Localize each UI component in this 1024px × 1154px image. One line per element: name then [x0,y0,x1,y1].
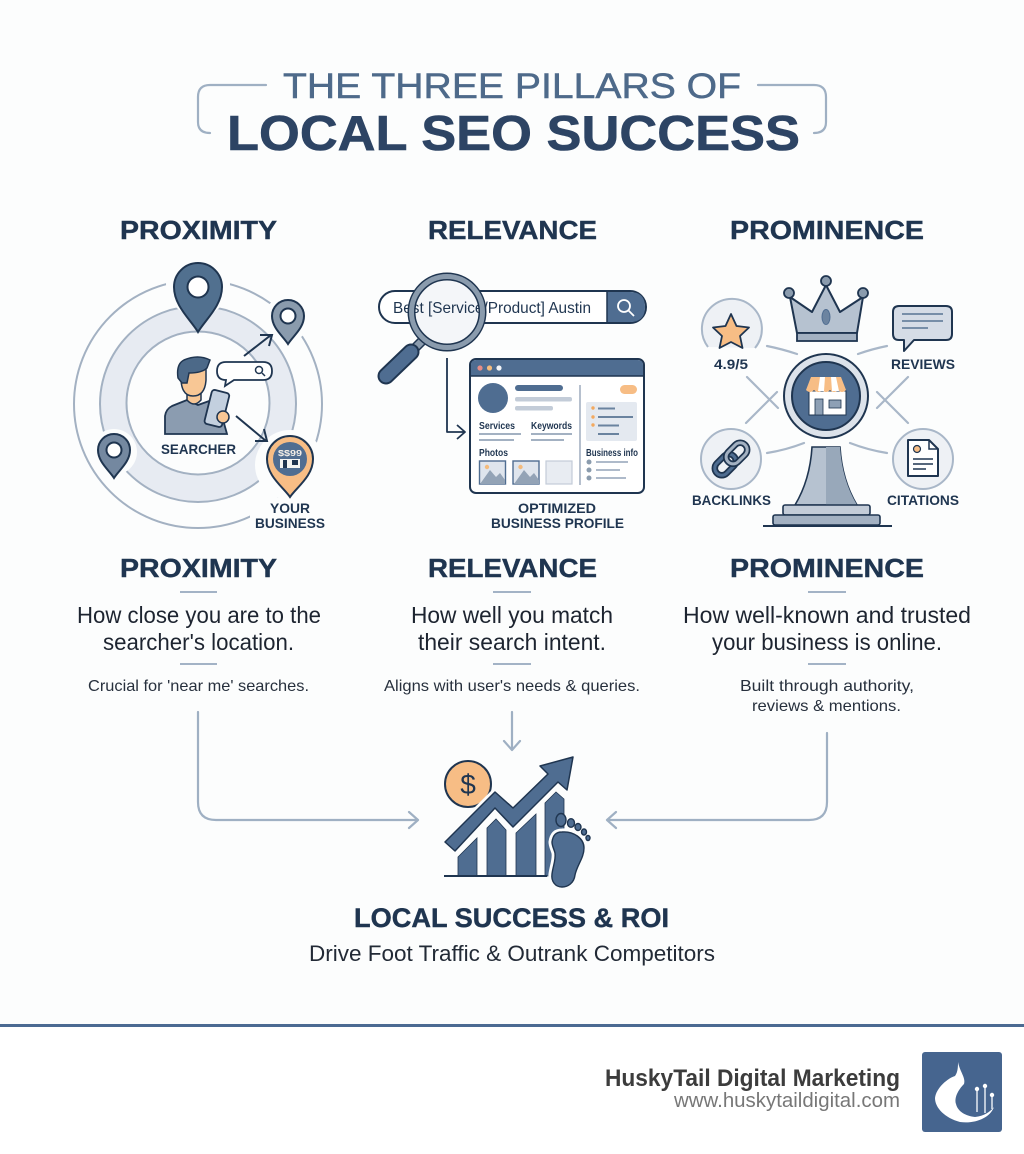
description: proximity [77,602,321,655]
description: proximity: searcher's location. [103,629,294,655]
label: your business: YOUR [270,500,310,516]
chart bars [458,792,564,876]
icon: logo [922,1052,1002,1132]
icon: trophy stand [763,447,892,526]
arrow: to your business [236,416,267,441]
photo thumbnail one [480,461,506,484]
rising arrow [445,757,573,851]
heading: prominence: PROMINENCE [730,215,924,245]
icon: growth chart with coin and footprint [444,757,590,887]
text block: relevance [384,553,640,695]
text block: proximity [77,553,321,695]
icon: central storefront medallion [784,354,868,438]
panel: proximity illustration [74,252,330,534]
icon: left map pin [98,434,130,478]
description: relevance: their search intent. [418,629,606,655]
panel: business profile window [470,359,644,493]
note: prominence [740,678,914,715]
description: prominence: How well-known and trusted [683,602,971,628]
result heading: LOCAL SUCCESS & ROI [354,903,669,933]
description: prominence [683,602,971,655]
description: prominence: your business is online. [712,629,942,655]
text block: prominence [683,553,971,715]
brand url: www.huskytaildigital.com [673,1090,900,1112]
magnifier lens fill [414,279,480,345]
heading: proximity: PROXIMITY [120,215,277,245]
description: relevance: How well you match [411,602,613,628]
label: business info: Business info [586,448,638,459]
panel: relevance illustration [379,276,646,531]
label: photos: Photos [479,448,508,459]
brand name: HuskyTail Digital Marketing [605,1065,900,1092]
icon: your business pin: $$99 [278,449,303,458]
icon: upper right map pin [272,300,304,344]
heading: relevance: RELEVANCE [428,215,597,245]
label: your business: BUSINESS [255,515,325,531]
search query text: Best [Service/Product] Austin [393,300,591,317]
note: prominence: Built through authority, [740,678,914,695]
title bracket right [758,85,826,133]
label: rating: 4.9/5 [714,356,748,372]
label: services: Services [479,421,515,432]
label: searcher: SEARCHER [161,441,236,457]
panel: prominence illustration [692,276,959,526]
title line two: LOCAL SEO SUCCESS [227,107,800,161]
subheading: proximity: PROXIMITY [120,553,277,583]
photo thumbnail two [513,461,539,484]
note: proximity: Crucial for 'near me' searches. [88,678,309,695]
title line one: THE THREE PILLARS OF [283,67,741,106]
icon: backlinks chain [701,429,761,489]
description: relevance [411,602,613,655]
icon: your business pin [267,436,313,497]
description: proximity: How close you are to the [77,602,321,628]
icon: dollar coin: $ [460,769,476,800]
label: optimized business profile: OPTIMIZED [518,500,596,516]
icon: searcher person [165,357,230,434]
icon: citations document [893,429,953,489]
subheading: prominence: PROMINENCE [730,553,924,583]
location rings [74,252,330,534]
label: your business [255,500,325,531]
info card [586,402,637,441]
arrow: prominence to success [607,733,827,828]
photo thumbnail three [546,461,572,484]
icon: magnifying glass [386,276,482,376]
label: backlinks: BACKLINKS [692,492,771,508]
arrow: search to profile [447,358,465,439]
subheading: relevance: RELEVANCE [428,553,597,583]
result subtitle: Drive Foot Traffic & Outrank Competitors [309,941,715,966]
icon: reviews speech bubble [893,306,952,351]
label: optimized business profile: BUSINESS PROFILE [491,515,624,531]
arrow: proximity to success [198,712,418,828]
arrow: relevance to success [504,712,520,750]
icon: footprint [552,814,590,887]
arrow: to upper pin [244,335,272,356]
label: optimized business profile [491,500,624,531]
icon: star rating [702,299,762,348]
search bar [379,291,646,323]
note: prominence: reviews & mentions. [752,698,901,715]
icon: crown [784,276,868,341]
footer [0,1024,1024,1154]
icon: dollar coin [445,761,491,807]
note: relevance: Aligns with user's needs & queries. [384,678,640,695]
label: citations: CITATIONS [887,492,959,508]
title [198,67,826,161]
icon: large map pin [174,263,222,332]
icon: search speech bubble [217,362,272,386]
title bracket left [198,85,266,133]
label: keywords: Keywords [531,421,572,432]
label: reviews: REVIEWS [891,356,955,372]
connector lines [746,346,908,453]
